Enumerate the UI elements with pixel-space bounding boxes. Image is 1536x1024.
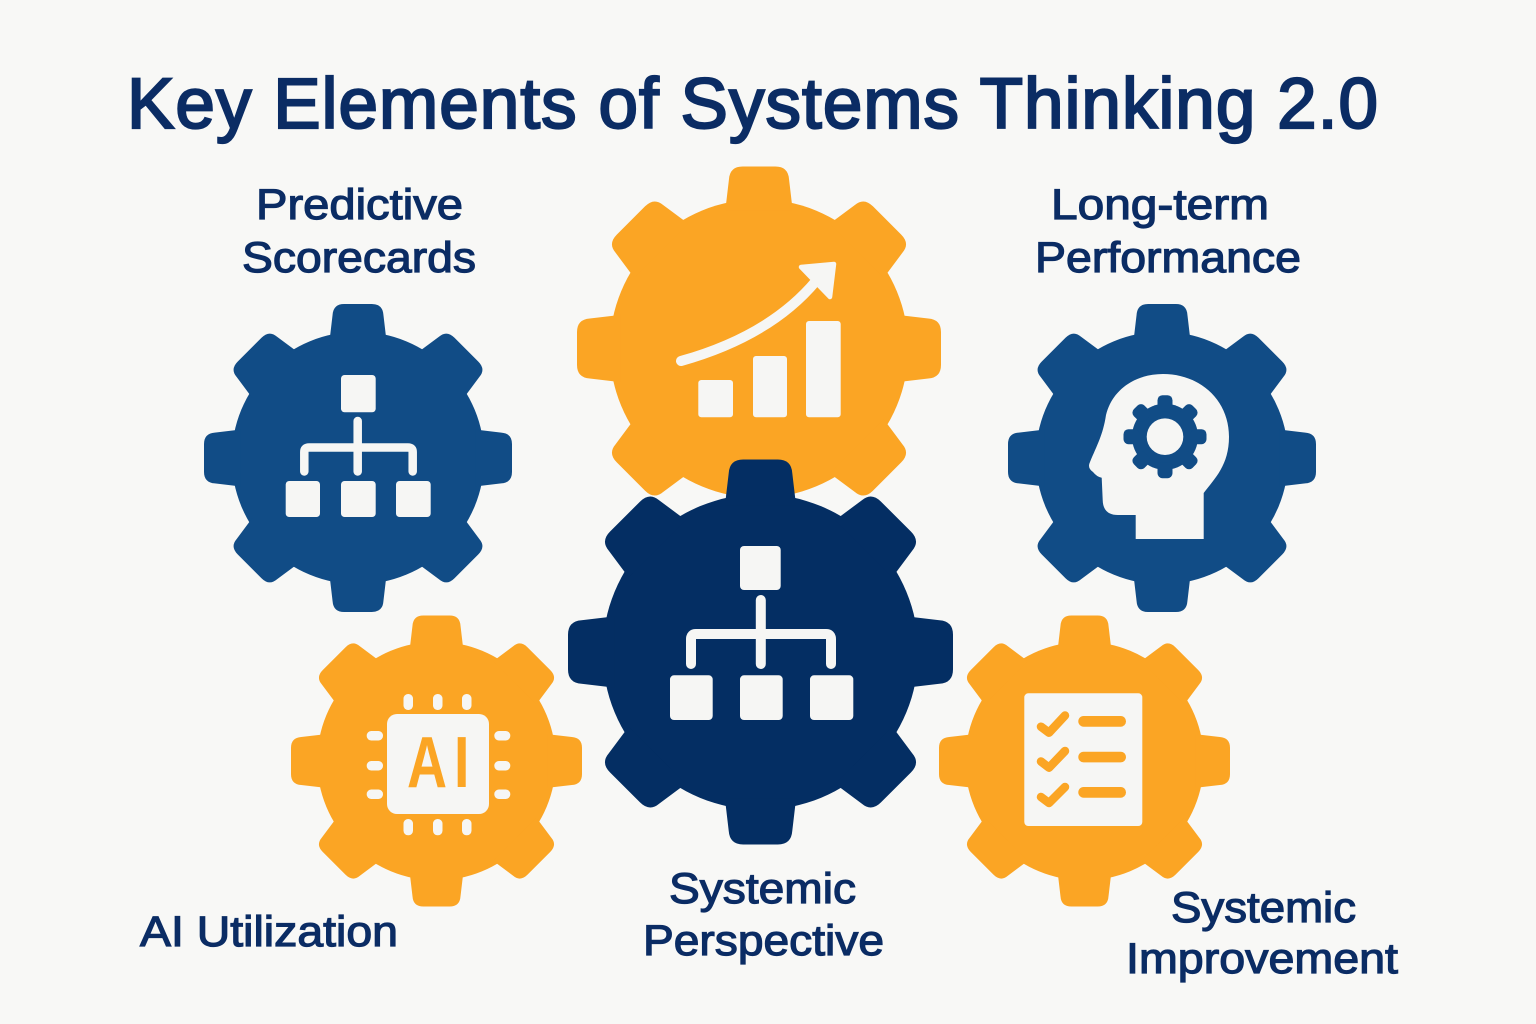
gear: systemic perspective (navy centre)	[568, 460, 953, 844]
gear: long-term growth chart (yellow top)	[577, 166, 941, 530]
gear: systemic improvement (yellow lower right)	[939, 616, 1230, 906]
label: Predictive Scorecards: Scorecards	[242, 234, 476, 282]
gear: AI utilization (yellow lower left)	[291, 616, 582, 906]
label: Systemic Improvement	[1126, 884, 1398, 983]
title: Key Elements of Systems Thinking 2.0	[127, 65, 1378, 144]
icon: head with gear	[1089, 374, 1229, 539]
gear: predictive scorecards (blue left)	[204, 304, 512, 612]
label: Long-term Performance: Performance	[1035, 234, 1301, 282]
label: Systemic Improvement: Improvement	[1126, 935, 1398, 983]
label: Systemic Perspective: Perspective	[643, 917, 884, 965]
label: Predictive Scorecards	[242, 181, 476, 282]
label: Long-term Performance	[1035, 181, 1301, 282]
icon: checklist	[1024, 693, 1142, 826]
label: Systemic Improvement: Systemic	[1171, 884, 1356, 932]
icon: rising bars and arrow	[681, 264, 841, 417]
icon: hierarchy large	[670, 546, 853, 720]
icon: hierarchy	[286, 375, 431, 517]
label: Systemic Perspective	[643, 865, 884, 965]
icon: AI chip: AI	[407, 722, 469, 803]
label: Predictive Scorecards: Predictive	[256, 181, 463, 229]
label: AI Utilization: AI Utilization	[140, 908, 398, 956]
label: Long-term Performance: Long-term	[1051, 181, 1269, 229]
icon: AI chip	[367, 694, 510, 835]
label: Systemic Perspective: Systemic	[669, 865, 856, 913]
gear: long-term performance (blue right)	[1008, 304, 1316, 612]
